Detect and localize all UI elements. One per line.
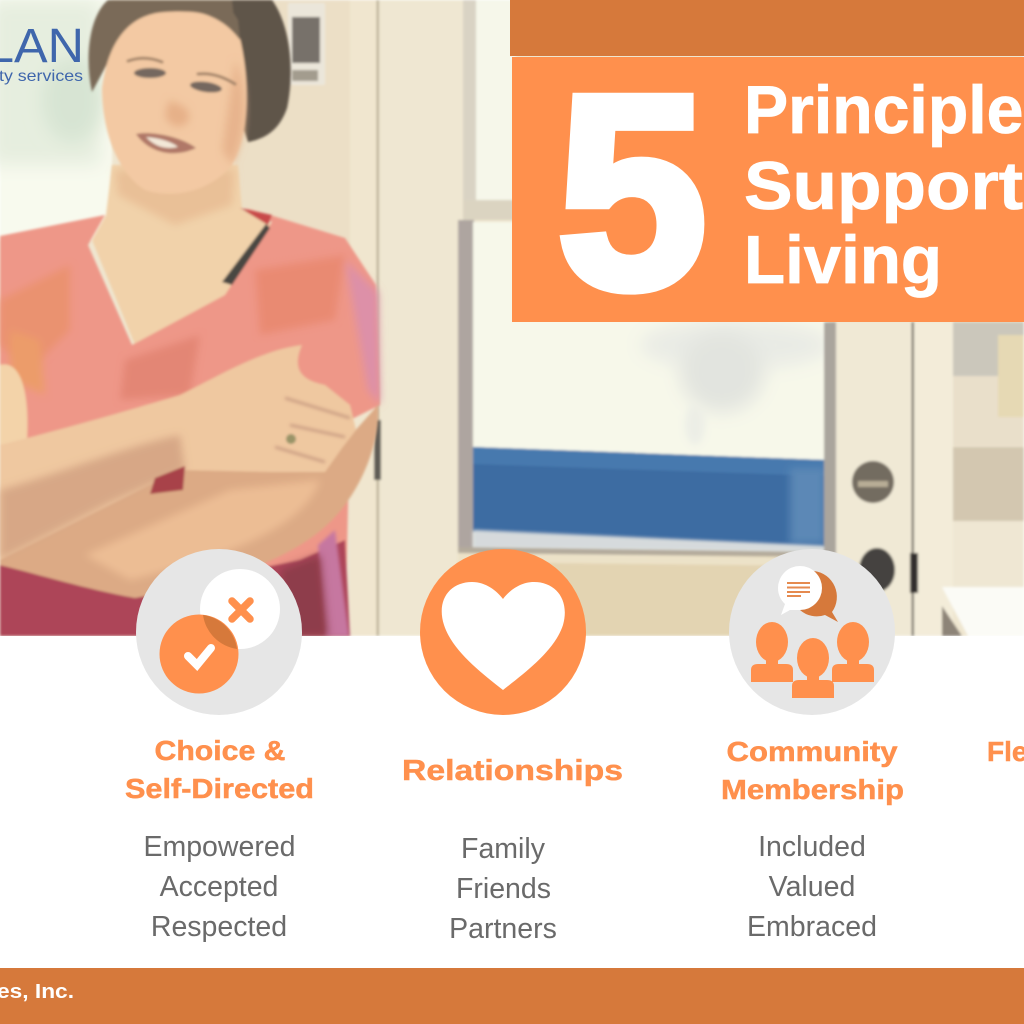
heading: Membership xyxy=(721,774,904,805)
list: Friends xyxy=(456,873,551,905)
list: Family xyxy=(461,833,546,865)
list: Included xyxy=(758,831,866,863)
finger shadows xyxy=(275,398,350,462)
hair xyxy=(86,0,249,142)
column: community membership xyxy=(721,736,904,943)
eyebrows and eyes xyxy=(128,58,235,84)
white lower panel xyxy=(0,636,1024,968)
forehead hair wisps xyxy=(204,12,242,40)
left upper arm xyxy=(0,364,27,445)
column: relationships xyxy=(402,755,623,945)
list xyxy=(449,833,557,945)
title banner top strip xyxy=(510,0,1024,56)
heading xyxy=(721,736,904,805)
heading xyxy=(125,735,314,804)
footer bar xyxy=(0,968,1024,1024)
logo on photo xyxy=(0,28,82,84)
list: Accepted xyxy=(160,871,278,903)
icon: choice check and cross xyxy=(136,549,302,715)
nose and mouth xyxy=(165,100,189,127)
upper arm and hand xyxy=(0,345,356,560)
heading: Choice & xyxy=(154,735,286,766)
door and room scene xyxy=(0,0,1024,636)
dark lower shirt xyxy=(0,540,350,636)
woman figure xyxy=(0,0,380,636)
icon: heart xyxy=(420,549,586,715)
list: Embraced xyxy=(747,911,877,943)
ring xyxy=(286,434,296,444)
face xyxy=(102,12,247,194)
lower arm xyxy=(0,405,378,598)
title banner xyxy=(512,39,1024,346)
icon: community xyxy=(729,549,895,715)
logo on photo: ty services xyxy=(0,68,83,85)
door knob and lock xyxy=(852,461,918,593)
list: Respected xyxy=(151,911,287,943)
title text: Living xyxy=(744,222,942,298)
column: choice and self-directed xyxy=(125,735,314,943)
list xyxy=(143,831,296,943)
list: Empowered xyxy=(143,831,296,863)
heading: Relationships xyxy=(402,755,623,787)
neck and chest xyxy=(92,165,272,345)
list: Partners xyxy=(449,913,557,945)
shirt xyxy=(0,208,382,568)
photo background: woman at door xyxy=(0,0,1024,636)
heading: Self-Directed xyxy=(125,773,314,804)
big number 5: 5 xyxy=(557,39,707,346)
list: Valued xyxy=(769,871,855,903)
people xyxy=(751,622,874,698)
title text xyxy=(744,72,1024,298)
speech bubbles xyxy=(778,566,838,622)
list xyxy=(747,831,877,943)
heading: Community xyxy=(726,736,898,767)
